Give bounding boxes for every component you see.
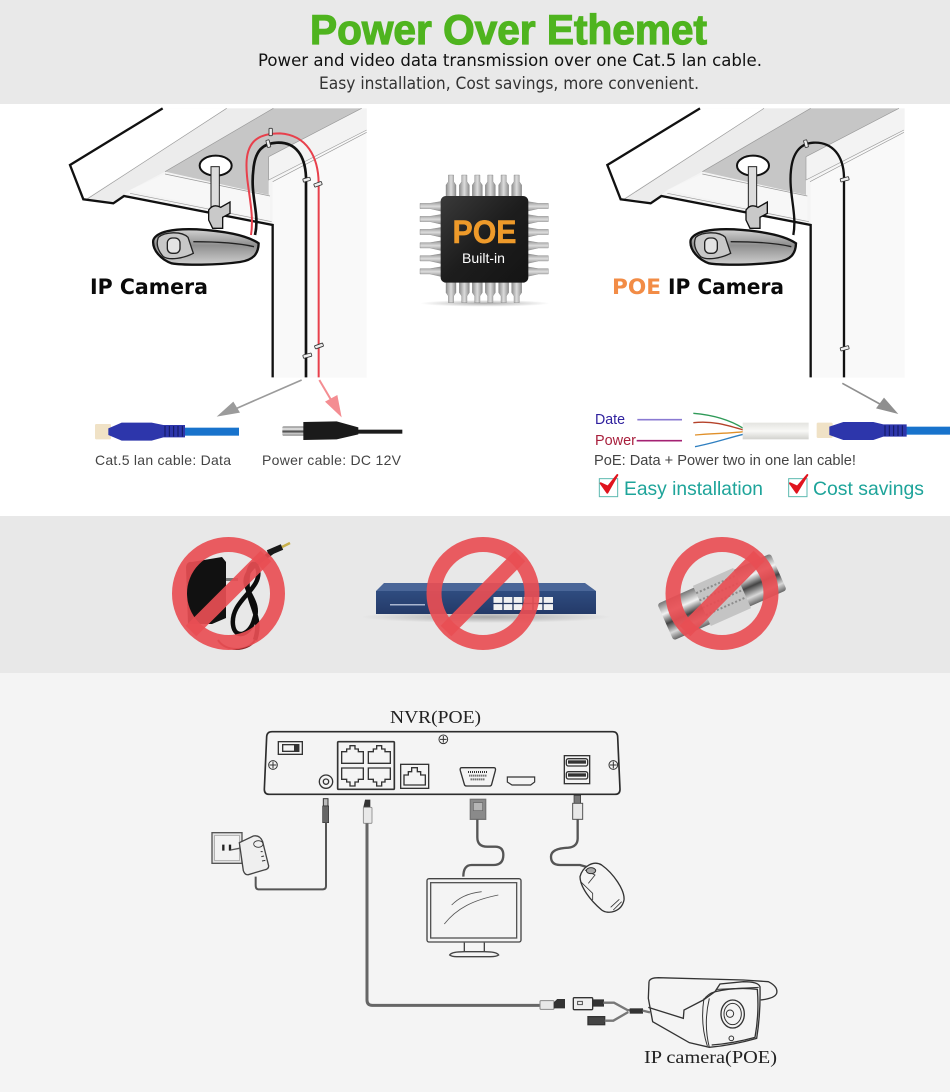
illustration: ceiling, wall and camera with separate cables — [70, 108, 402, 441]
power pointer line — [637, 438, 682, 443]
label: Date: Date — [595, 411, 625, 428]
screws — [269, 735, 618, 769]
panel: POE IP camera wiring — [594, 108, 950, 500]
NVR chassis — [264, 732, 620, 794]
network plug at nvr — [363, 800, 372, 947]
illustration: ceiling, wall and camera with one cable — [599, 108, 950, 497]
data cable black — [253, 143, 306, 377]
benefit: easy installation: Easy installation — [624, 478, 763, 500]
subtitle line one: Power and video data transmission over one Cat.5 lan cable. — [258, 51, 762, 70]
vga port — [460, 768, 495, 786]
checkbox: easy installation — [599, 475, 618, 497]
label: POE: POE — [612, 275, 661, 299]
power switch — [278, 742, 302, 754]
chip text built-in: Built-in — [462, 250, 505, 266]
panel: header band — [0, 0, 950, 104]
subtitle line two: Easy installation, Cost savings, more convenient. — [319, 74, 699, 93]
item: bnc coupler crossed out — [656, 544, 788, 642]
camera mount — [737, 156, 769, 228]
chip icon: POE built-in — [420, 175, 550, 307]
caption: power cable: Power cable: DC 12V — [262, 452, 402, 468]
camera mount — [200, 156, 232, 228]
label: IP camera(POE): IP camera(POE) — [644, 1047, 777, 1068]
panel: NVR connection diagram — [0, 673, 950, 1092]
camera housing — [648, 978, 777, 1047]
lan cable plug — [95, 423, 239, 441]
stripped wires — [693, 413, 743, 447]
four poe ports — [338, 742, 394, 789]
label: IP Camera: IP Camera — [90, 275, 208, 299]
power cable red — [246, 133, 319, 377]
usb plug, cable and mouse — [551, 795, 624, 912]
cable clips — [266, 128, 324, 358]
arrow to power cable — [319, 380, 342, 417]
lan cable plug — [817, 422, 950, 440]
camera body — [690, 229, 796, 265]
camera dc socket — [588, 1009, 650, 1025]
heading: NVR(POE): NVR(POE) — [390, 707, 481, 728]
date pointer line — [637, 417, 682, 422]
white cable jacket — [743, 423, 809, 439]
arrow to lan cable — [217, 380, 302, 417]
chip text POE: POE — [452, 214, 516, 250]
usb ports — [564, 756, 590, 784]
panel: not needed items — [0, 516, 950, 673]
NVR back panel and devices — [212, 732, 624, 947]
label: Power: Power — [595, 432, 636, 449]
item: power adapter crossed out — [180, 543, 290, 649]
network cable run — [367, 930, 540, 1005]
checkbox: cost savings — [789, 475, 807, 497]
label: IP Camera: IP Camera — [668, 275, 784, 299]
panel: standard IP camera wiring — [70, 108, 402, 468]
ip camera with pigtail cable — [367, 930, 777, 1047]
caption: lan cable: Cat.5 lan cable: Data — [95, 452, 231, 468]
arrow to poe lan cable — [842, 383, 898, 414]
hdmi port — [507, 777, 535, 785]
monitor stand — [450, 943, 499, 957]
camera body — [153, 229, 259, 265]
dc power plug — [282, 421, 402, 440]
benefit: cost savings: Cost savings — [813, 478, 924, 500]
single poe cable — [790, 143, 844, 377]
cable clips — [803, 140, 849, 351]
vga plug, cable and monitor — [427, 799, 521, 942]
dc power jack — [319, 775, 333, 788]
power plug and adapter cable — [212, 799, 329, 889]
item: network switch crossed out — [361, 544, 611, 642]
title: Power Over Ethemet — [310, 6, 707, 53]
caption: poe cable: PoE: Data + Power two in one lan cable! — [594, 453, 856, 469]
camera network socket — [573, 998, 633, 1011]
rj45 plug — [540, 999, 565, 1009]
lan port — [401, 764, 429, 788]
